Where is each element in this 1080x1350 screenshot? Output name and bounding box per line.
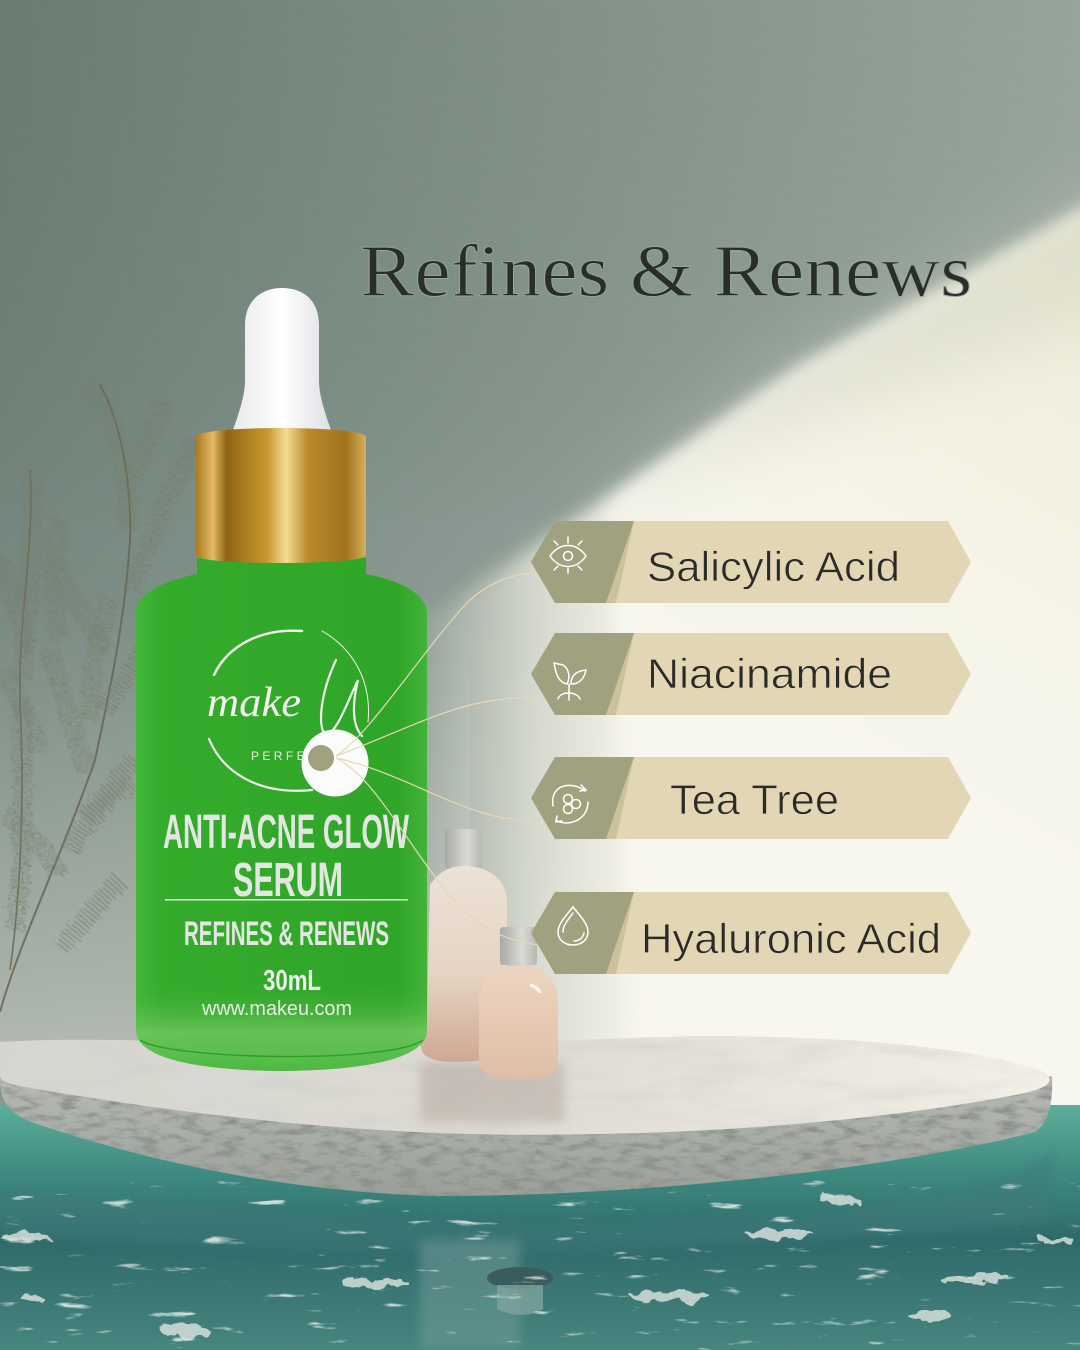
label: Salicylic Acid: Salicylic Acid <box>647 543 900 590</box>
label: Hyaluronic Acid: Hyaluronic Acid <box>641 915 941 962</box>
icon: water drop <box>558 907 588 945</box>
label: Niacinamide <box>531 633 971 715</box>
icon: molecules with cycle arrows <box>553 785 588 823</box>
serum bottle: REFINES & RENEWS <box>184 915 389 953</box>
connector lines <box>336 572 540 945</box>
label: Salicylic Acid <box>531 521 971 603</box>
icon: sprout <box>554 663 586 700</box>
marble platform <box>0 1036 1052 1196</box>
logo: make U <box>207 631 369 791</box>
label: Tea Tree <box>531 757 971 839</box>
short cream bottle <box>479 927 558 1079</box>
logo: make U: PERFE <box>251 749 308 763</box>
light beam on wall <box>380 150 1080 1130</box>
serum bottle: www.makeu.com <box>201 998 352 1020</box>
label: Hyaluronic Acid <box>531 892 971 974</box>
serum bottle: SERUM <box>233 854 343 907</box>
small cosmetic bottles <box>421 829 558 1079</box>
water surface <box>0 1105 1080 1350</box>
dropper bulb <box>232 288 332 433</box>
serum bottle <box>136 288 427 1071</box>
green glass body <box>136 558 427 1071</box>
label: Niacinamide: Niacinamide <box>647 650 892 697</box>
title: Refines & Renews <box>360 231 972 313</box>
icon: eye <box>550 537 586 573</box>
label: Tea Tree: Tea Tree <box>670 776 839 823</box>
label text: ANTI-ACNE GLOW <box>163 806 409 859</box>
plant: dried branches <box>0 385 195 1012</box>
gold collar <box>196 428 366 563</box>
connector hub <box>302 730 368 796</box>
tall cream bottle <box>421 829 507 1062</box>
logo: make U: make <box>207 680 301 726</box>
serum bottle: 30mL <box>263 965 321 997</box>
